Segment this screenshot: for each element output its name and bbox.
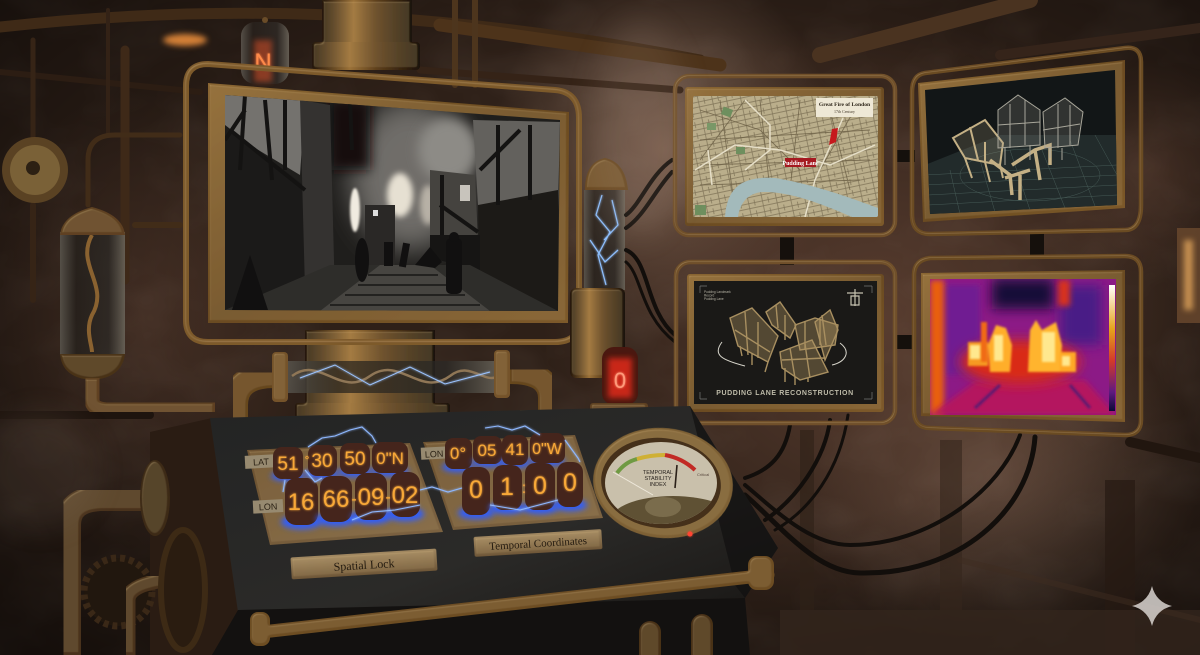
reconstruction screen — [694, 281, 877, 404]
nixie tubes: longitude: 0° — [450, 444, 466, 463]
tag: LAT — [245, 454, 278, 469]
electric arcs around tubes — [283, 426, 580, 520]
cables to monitors — [626, 160, 1035, 573]
nixie tubes: date: 02 — [392, 482, 418, 509]
left glass cylinder — [60, 207, 215, 410]
center column below main screen — [295, 330, 450, 420]
icon: wall dial — [2, 137, 68, 203]
nixie tubes: longitude: 05 — [478, 441, 496, 460]
nixie tubes: latitude: 30 — [311, 451, 333, 472]
nixie tubes: longitude — [442, 433, 565, 472]
panel: Pudding Lane reconstruction — [676, 262, 895, 423]
gauge: temporal stability index — [592, 428, 734, 538]
wall lamp glow — [163, 34, 207, 46]
plaque: Spatial Lock: Spatial Lock — [333, 556, 395, 574]
lower brass handle — [250, 556, 774, 655]
nixie tubes: time: 0 — [533, 472, 547, 500]
nixie tubes: date: - — [351, 491, 357, 508]
plaque: Temporal Coordinates — [474, 529, 602, 557]
tag: LON left: LON — [259, 501, 278, 512]
panel: thermal image — [914, 256, 1141, 435]
plaque: Temporal Coordinates: Temporal Coordinates — [489, 535, 587, 553]
control console — [150, 406, 778, 655]
pipe frame: main screen — [186, 64, 579, 342]
gauge title: TEMPORAL — [643, 470, 673, 476]
archival street fire photograph — [220, 90, 565, 315]
nixie tubes: latitude: 0"N — [376, 449, 404, 468]
icon: sparkle watermark — [1132, 586, 1172, 626]
icon: red nixie lamp: 0 — [614, 368, 626, 393]
lightning glass tube column — [570, 158, 628, 378]
map sheet: Great Fire of London — [819, 102, 871, 108]
gears and lower left pipes — [68, 460, 205, 655]
nixie tubes: time: : — [522, 480, 526, 497]
pipe frame: wireframe — [912, 48, 1141, 234]
nixie tubes: date — [281, 472, 424, 529]
gauge face: Critical — [697, 472, 709, 477]
pipe frame: thermal — [914, 256, 1141, 435]
title: Pudding Lane reconstruction: PUDDING LANE RECONSTRUCTION — [716, 390, 854, 397]
frame: map — [685, 87, 884, 226]
monitor stems — [780, 150, 1044, 349]
red LED — [688, 532, 692, 536]
frame: main screen — [208, 83, 569, 323]
console front — [212, 598, 750, 655]
gauge bezel — [588, 421, 738, 545]
nixie tubes: longitude: 0"W — [532, 441, 563, 458]
model: timber house cluster — [730, 302, 838, 385]
frame: thermal — [921, 270, 1125, 422]
main screen assembly — [186, 64, 579, 342]
icon: top nixie lamp: N — [254, 49, 272, 76]
horizontal glass tube with elbows — [212, 350, 566, 428]
right wall glass lamp — [1177, 228, 1200, 323]
orbit arcs — [718, 342, 846, 366]
nixie tubes: latitude: ° — [305, 453, 310, 467]
pipe frame: map — [675, 76, 895, 235]
thermal heat map — [930, 279, 1116, 415]
wireframe screen — [925, 70, 1117, 214]
small caption: Pudding Landmark — [704, 290, 731, 294]
gauge title: INDEX — [650, 482, 667, 488]
nixie tubes: date: 66 — [323, 486, 349, 513]
icon: building miniature — [847, 289, 863, 306]
panel: temporal coordinates plate — [423, 435, 603, 530]
map sheet: Pudding Lane — [782, 161, 819, 167]
tag: LON left — [253, 499, 283, 514]
frame: wireframe — [918, 60, 1125, 222]
nixie tubes: latitude: 51 — [277, 454, 299, 475]
tag: LON right: LON — [425, 449, 444, 460]
steam overlay — [0, 20, 690, 530]
nixie tubes: time — [458, 462, 587, 519]
gauge title: STABILITY — [644, 476, 672, 482]
nixie tubes: time: 0 — [563, 469, 577, 497]
panel: spatial lock plate — [247, 443, 443, 545]
console side — [150, 418, 240, 655]
small caption: Record — [704, 294, 715, 298]
plaque: Spatial Lock — [290, 549, 438, 579]
map sheet — [693, 96, 878, 217]
nixie tubes: date: - — [385, 489, 391, 506]
tag: LAT: LAT — [253, 457, 270, 467]
console top — [210, 406, 778, 612]
icon: top nixie lamp — [241, 17, 289, 84]
gauge face — [605, 442, 717, 524]
nixie tubes: latitude — [271, 442, 409, 481]
figures in the street — [232, 232, 462, 310]
panel: map of the Great Fire of London — [675, 76, 895, 235]
panel: wireframe building model — [912, 48, 1141, 234]
model: rear translucent houses — [998, 95, 1083, 165]
map sheet: 17th Century — [834, 109, 855, 114]
nixie tubes: longitude: 41 — [506, 440, 524, 459]
small caption: Pudding Lane — [704, 297, 724, 301]
nixie tubes: latitude: 50 — [344, 449, 366, 470]
model: left house — [953, 120, 1050, 200]
nixie tubes: time: 0 — [469, 476, 483, 504]
frame: reconstruction — [687, 274, 884, 412]
icon: red nixie lamp — [590, 347, 648, 416]
nixie tubes: date: 09 — [358, 484, 384, 511]
top brass column — [312, 0, 420, 70]
tag: LON right — [421, 446, 448, 460]
pipe frame: reconstruction — [676, 262, 895, 423]
nixie tubes: time: 1 — [500, 473, 514, 501]
nixie tubes: date: 16 — [288, 489, 314, 516]
